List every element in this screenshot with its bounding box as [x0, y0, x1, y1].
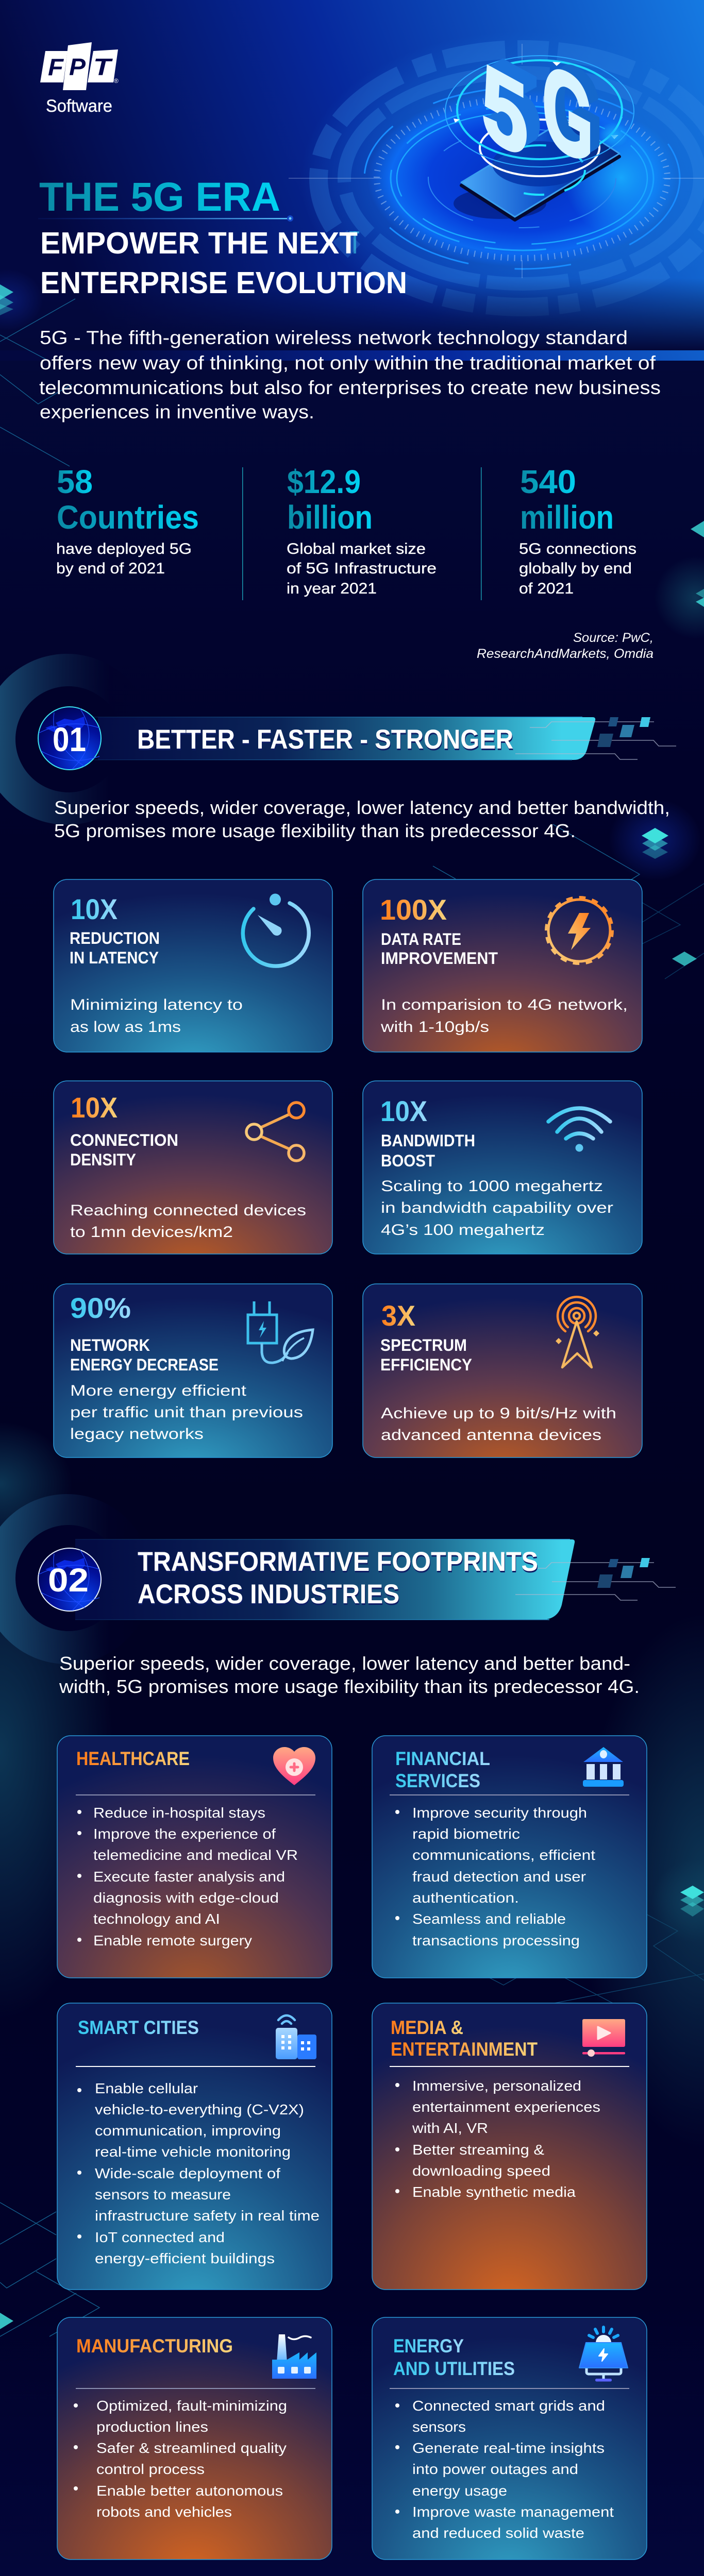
list: financial points: communications, efficient — [412, 1847, 595, 1863]
title: ENTERPRISE EVOLUTION — [40, 266, 407, 300]
list: healthcare points: Enable remote surgery — [93, 1933, 252, 1948]
paragraph 02 — [59, 1653, 640, 1697]
list: smart cities points: energy-efficient buildings — [95, 2250, 275, 2266]
icon: 3D 5G lettering — [482, 36, 600, 191]
list: energy points — [395, 2398, 614, 2541]
list: energy points: sensors — [412, 2419, 466, 2435]
intro paragraph — [39, 327, 661, 422]
icon: stopwatch — [243, 893, 309, 966]
stat: 540 million: million — [520, 499, 614, 536]
list: financial points: fraud detection and user — [412, 1869, 586, 1885]
list: manufacturing points: control process — [96, 2461, 205, 2477]
list: media points: Immersive, personalized — [412, 2078, 581, 2094]
stat: 540 million: 540 — [520, 463, 576, 500]
panel: healthcare: HEALTHCARE — [76, 1748, 190, 1769]
logo: FPT Software: P — [69, 54, 86, 80]
list: healthcare points — [77, 1805, 298, 1948]
list: healthcare points: Execute faster analysis and — [93, 1869, 285, 1885]
stat: 540 million: of 2021 — [519, 580, 574, 597]
panel: 90% network energy decrease: legacy networks — [70, 1426, 204, 1443]
stat: 58 countries — [56, 463, 199, 577]
panel: smart cities — [57, 2003, 332, 2290]
stat: 12.9 billion — [287, 463, 437, 597]
panel: 10X connection density: Reaching connected devices — [70, 1202, 306, 1219]
list: media points: downloading speed — [412, 2163, 550, 2179]
panel: media and entertainment: MEDIA & — [391, 2017, 463, 2038]
list: financial points: Seamless and reliable — [412, 1911, 566, 1927]
list: media points — [395, 2078, 600, 2200]
panel: 10X bandwidth boost: BANDWIDTH — [381, 1131, 475, 1150]
logo: FPT Software: Software — [46, 96, 112, 116]
list: healthcare points: technology and AI — [93, 1911, 220, 1927]
stat: 12.9 billion: of 5G Infrastructure — [287, 560, 437, 577]
list: smart cities points — [77, 2080, 320, 2266]
panel: media and entertainment — [372, 2003, 647, 2290]
panel: 10X connection density: DENSITY — [70, 1150, 136, 1169]
list: smart cities points: communication, improving — [95, 2123, 281, 2139]
panel: 10X bandwidth boost — [363, 1081, 642, 1254]
heading 02: TRANSFORMATIVE FOOTPRINTS — [138, 1547, 538, 1577]
list: energy points: energy usage — [412, 2483, 507, 2499]
panel: 3X spectrum efficiency — [363, 1284, 642, 1458]
list: media points: Better streaming & — [412, 2142, 544, 2158]
panel: 10X reduction in latency: 10X — [71, 893, 118, 925]
panel: 10X connection density: 10X — [71, 1091, 118, 1124]
source note: Source: PwC, — [573, 631, 653, 645]
source note — [477, 631, 653, 661]
list: financial points — [395, 1805, 595, 1948]
list: healthcare points: Reduce in-hospital stays — [93, 1805, 265, 1821]
panel: 10X connection density: to 1mn devices/km2 — [70, 1224, 233, 1241]
stat: 12.9 billion: billion — [287, 499, 373, 536]
panel: 90% network energy decrease: 90% — [70, 1292, 131, 1324]
list: manufacturing points: robots and vehicles — [96, 2504, 232, 2520]
stat: 540 million: 5G connections — [519, 540, 636, 557]
panel: 100X data rate improvement: DATA RATE — [381, 930, 461, 948]
title — [38, 174, 407, 300]
icon: bank — [583, 1747, 624, 1787]
panel: 10X reduction in latency: Minimizing latency to — [70, 996, 243, 1013]
logo: FPT Software: T — [93, 54, 113, 80]
logo: FPT Software — [40, 42, 119, 116]
intro paragraph: telecommunications but also for enterprises to create new business — [39, 377, 661, 398]
heading 01: BETTER - FASTER - STRONGER — [137, 724, 513, 755]
panel: 10X reduction in latency: REDUCTION — [70, 929, 160, 947]
intro paragraph: 5G - The fifth-generation wireless network technology standard — [40, 327, 628, 348]
list: financial points: Improve security through — [412, 1805, 587, 1821]
list: healthcare points: telemedicine and medical VR — [93, 1847, 298, 1863]
panel: 10X reduction in latency — [54, 879, 332, 1052]
panel: 10X connection density: CONNECTION — [70, 1131, 178, 1149]
list: manufacturing points: Safer & streamlined quality — [96, 2440, 287, 2456]
stat: 540 million: globally by end — [519, 560, 632, 577]
list: energy points: Connected smart grids and — [412, 2398, 605, 2414]
panel: media and entertainment: ENTERTAINMENT — [391, 2039, 538, 2060]
logo: FPT Software: ® — [114, 77, 119, 84]
list: smart cities points: IoT connected and — [95, 2229, 225, 2245]
list: smart cities points: real-time vehicle monitoring — [95, 2144, 291, 2160]
panel: 90% network energy decrease — [54, 1284, 332, 1458]
panel: 3X spectrum efficiency: advanced antenna devices — [381, 1427, 601, 1444]
panel: manufacturing — [57, 2317, 332, 2560]
panel: energy and utilities: ENERGY — [393, 2335, 464, 2357]
list: smart cities points: Enable cellular — [95, 2080, 198, 2096]
icon: plug and leaf — [248, 1301, 313, 1363]
panel: 3X spectrum efficiency: EFFICIENCY — [380, 1355, 472, 1374]
list: financial points: transactions processing — [412, 1933, 580, 1948]
paragraph 02: width, 5G promises more usage flexibility than its predecessor 4G. — [59, 1676, 640, 1697]
list: financial points: authentication. — [412, 1890, 519, 1906]
stat: 12.9 billion: Global market size — [287, 540, 426, 557]
icon: antenna tower — [556, 1297, 599, 1367]
panel: 100X data rate improvement: In comparision to 4G network, — [381, 996, 628, 1013]
list: healthcare points: diagnosis with edge-cloud — [93, 1890, 279, 1906]
panel: 90% network energy decrease: NETWORK — [70, 1336, 150, 1354]
icon: heart — [273, 1747, 315, 1785]
list: manufacturing points: Enable better autonomous — [96, 2483, 283, 2499]
panel: 10X reduction in latency: IN LATENCY — [70, 948, 159, 967]
panel: 10X bandwidth boost: BOOST — [381, 1151, 435, 1170]
icon: 3D 5G lettering: G — [542, 36, 593, 191]
stat: 58 countries: Countries — [57, 499, 199, 536]
title: THE 5G ERA — [39, 174, 280, 219]
list: smart cities points: Wide-scale deployment of — [95, 2165, 280, 2181]
panel: 90% network energy decrease: ENERGY DECREASE — [70, 1355, 219, 1374]
icon: lightning badge — [546, 897, 612, 963]
list: energy points: Generate real-time insights — [412, 2440, 605, 2456]
panel: manufacturing: MANUFACTURING — [76, 2335, 233, 2357]
stat: 58 countries: 58 — [57, 463, 93, 500]
icon: factory — [272, 2334, 316, 2379]
panel: energy and utilities: AND UTILITIES — [393, 2358, 515, 2379]
icon: share nodes — [246, 1103, 304, 1161]
panel: 100X data rate improvement: 100X — [380, 893, 447, 926]
panel: 3X spectrum efficiency: 3X — [381, 1299, 415, 1332]
paragraph 01: 5G promises more usage flexibility than its predecessor 4G. — [54, 820, 576, 841]
list: energy points: into power outages and — [412, 2461, 578, 2477]
icon: wifi — [548, 1108, 610, 1152]
panel: healthcare — [57, 1736, 332, 1978]
list: smart cities points: infrastructure safety in real time — [95, 2208, 320, 2224]
title: EMPOWER THE NEXT — [40, 226, 358, 260]
panel: 10X bandwidth boost: 10X — [380, 1095, 427, 1127]
panel: 10X bandwidth boost: 4G’s 100 megahertz — [381, 1222, 545, 1239]
panel: 10X reduction in latency: as low as 1ms — [70, 1019, 181, 1036]
panel: 3X spectrum efficiency: Achieve up to 9 bit/s/Hz with — [381, 1405, 616, 1422]
list: manufacturing points — [74, 2398, 287, 2520]
list: smart cities points: vehicle-to-everything (C-V2X) — [95, 2102, 304, 2117]
icon: smart building — [276, 2015, 316, 2059]
panel: 90% network energy decrease: More energy efficient — [70, 1382, 247, 1399]
panel: 10X bandwidth boost: in bandwidth capability over — [381, 1199, 613, 1216]
paragraph 02: Superior speeds, wider coverage, lower latency and better band- — [59, 1653, 630, 1674]
panel: energy and utilities — [372, 2317, 647, 2560]
stat: 12.9 billion: in year 2021 — [287, 580, 377, 597]
paragraph 01 — [54, 797, 670, 841]
list: healthcare points: Improve the experience of — [93, 1826, 276, 1842]
heading 02: ACROSS INDUSTRIES — [138, 1579, 399, 1609]
panel: financial services: SERVICES — [395, 1770, 480, 1791]
panel: smart cities: SMART CITIES — [78, 2017, 199, 2038]
list: energy points: Improve waste management — [412, 2504, 614, 2520]
paragraph 01: Superior speeds, wider coverage, lower latency and better bandwidth, — [54, 797, 670, 818]
list: media points: with AI, VR — [412, 2120, 488, 2136]
list: financial points: rapid biometric — [412, 1826, 520, 1842]
list: energy points: and reduced solid waste — [412, 2525, 584, 2541]
panel: 100X data rate improvement: with 1-10gb/s — [380, 1019, 489, 1036]
panel: 90% network energy decrease: per traffic unit than previous — [70, 1404, 303, 1421]
list: manufacturing points: production lines — [96, 2419, 208, 2435]
list: media points: entertainment experiences — [412, 2099, 600, 2115]
panel: 100X data rate improvement: IMPROVEMENT — [381, 949, 498, 968]
stat: 12.9 billion: $12.9 — [287, 463, 361, 500]
decorative diamond stacks — [0, 284, 704, 2329]
panel: 10X bandwidth boost: Scaling to 1000 megahertz — [381, 1178, 603, 1195]
heading 02 — [138, 1547, 538, 1609]
glow accents — [0, 269, 704, 2148]
icon: video player — [582, 2019, 625, 2057]
globe badge 02 — [38, 1548, 101, 1611]
panel: financial services — [372, 1736, 647, 1978]
stat: 540 million — [519, 463, 636, 597]
list: smart cities points: sensors to measure — [95, 2187, 231, 2202]
intro paragraph: experiences in inventive ways. — [40, 401, 314, 422]
icon: smart energy lamp — [579, 2327, 628, 2381]
intro paragraph: offers new way of thinking, not only within the traditional market of — [40, 352, 656, 374]
icon: smartphone — [445, 56, 634, 220]
panel: financial services: FINANCIAL — [395, 1748, 490, 1769]
stat: 58 countries: have deployed 5G — [56, 540, 192, 557]
panel: 3X spectrum efficiency: SPECTRUM — [380, 1336, 467, 1354]
source note: ResearchAndMarkets, Omdia — [477, 647, 653, 661]
stat: 58 countries: by end of 2021 — [56, 560, 165, 577]
globe badge 01: 01 — [53, 720, 86, 758]
panel: 100X data rate improvement — [363, 879, 642, 1052]
background network lines — [0, 299, 704, 2336]
globe badge 01 — [38, 707, 101, 770]
section header 01 — [0, 654, 676, 825]
list: media points: Enable synthetic media — [412, 2184, 576, 2200]
icon: 3D 5G lettering: 5 — [482, 41, 528, 181]
section header 02 — [0, 1494, 676, 1664]
logo: FPT Software: F — [48, 54, 64, 80]
panel: 10X connection density — [54, 1081, 332, 1254]
list: manufacturing points: Optimized, fault-minimizing — [96, 2398, 287, 2414]
globe badge 02: 02 — [48, 1562, 89, 1599]
